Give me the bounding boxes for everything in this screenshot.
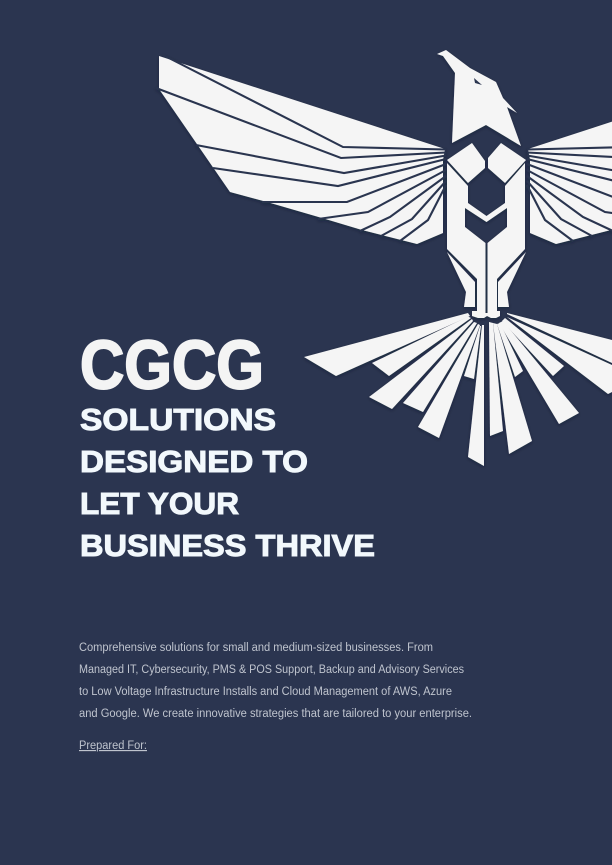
description: and Google. We create innovative strategies that are tailored to your enterprise. [79,708,472,720]
right wing [527,55,612,244]
tail feathers [304,313,612,466]
prepared for label: Prepared For: [79,740,147,752]
chest [447,143,526,183]
body [447,163,525,312]
headline [80,402,375,563]
head [437,50,521,146]
left leg [447,252,475,307]
description: Managed IT, Cybersecurity, PMS & POS Support, Backup and Advisory Services [79,664,464,676]
headline: SOLUTIONS [80,402,276,437]
headline: LET YOUR [80,486,239,521]
headline: BUSINESS THRIVE [80,528,375,563]
eye [474,78,482,85]
feet [472,311,500,318]
brand name: CGCG [80,326,264,404]
headline: DESIGNED TO [80,444,308,479]
description: Comprehensive solutions for small and medium-sized businesses. From [79,642,433,654]
eagle logo [156,50,612,466]
description: to Low Voltage Infrastructure Installs and Cloud Management of AWS, Azure [79,686,452,698]
right leg [498,252,526,307]
left wing [156,55,446,244]
description [79,642,472,720]
